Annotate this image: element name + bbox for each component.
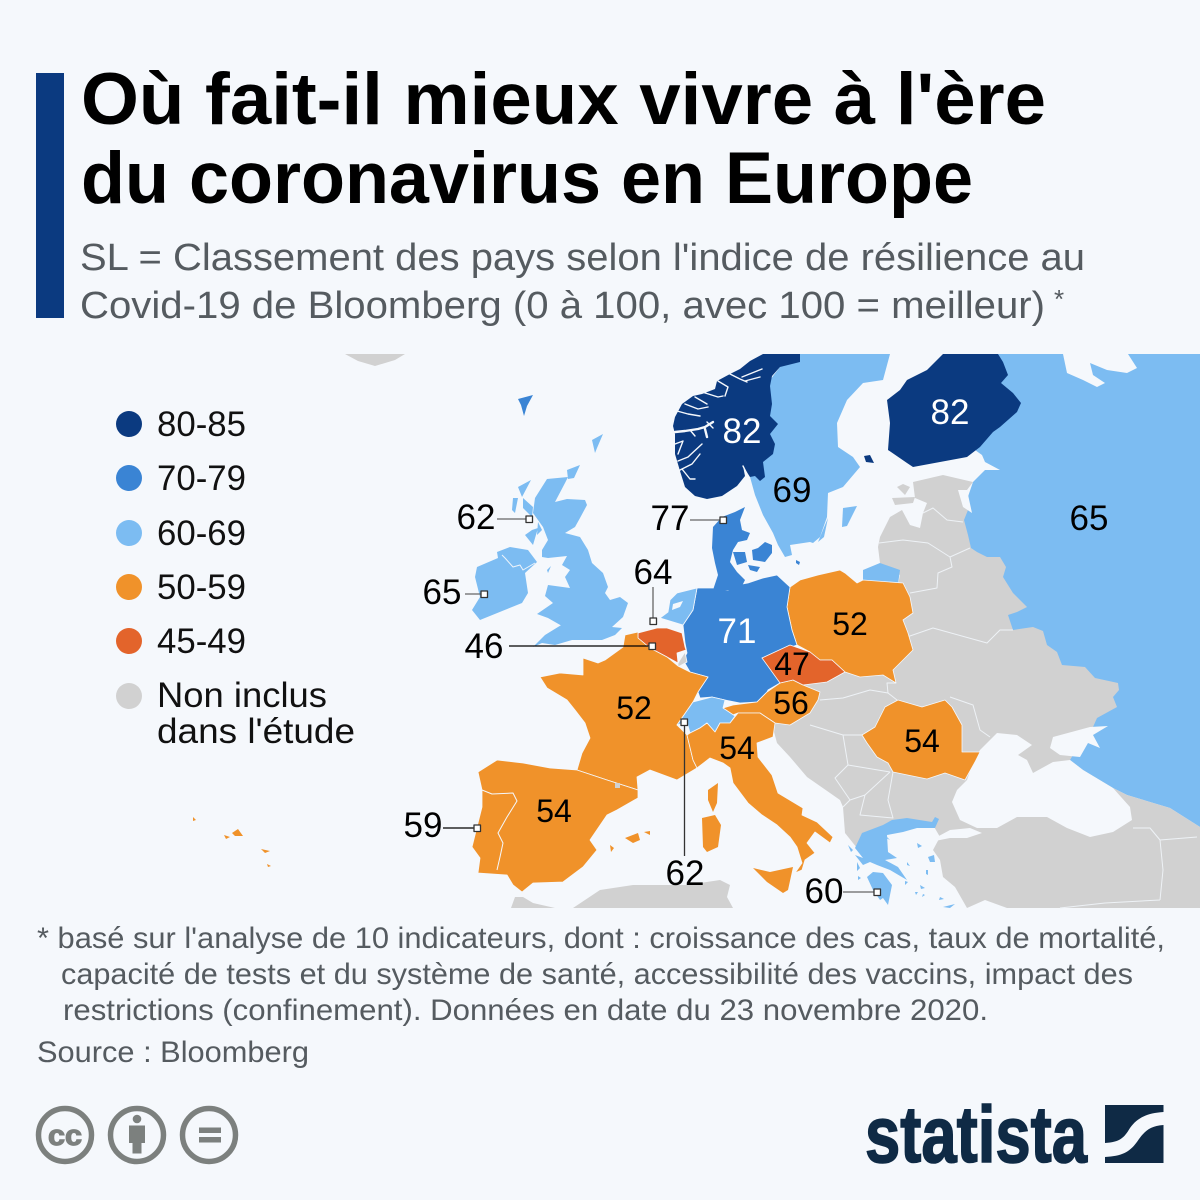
title bbox=[81, 59, 1046, 219]
map value labels: 54 bbox=[904, 723, 940, 759]
map value labels: 65 bbox=[1070, 499, 1108, 538]
Switzerland bbox=[677, 697, 735, 733]
legend item 70-79: 70-79 bbox=[157, 459, 246, 498]
United Kingdom bbox=[533, 477, 628, 647]
Zuiderzee inlet bbox=[672, 601, 683, 610]
Denmark Zealand, Funen, Lolland, Bornholm bbox=[733, 542, 800, 572]
title accent bar bbox=[36, 73, 64, 318]
Statista logo wordmark: statista bbox=[865, 1090, 1087, 1179]
Norway bbox=[673, 354, 800, 499]
Greek islands bbox=[848, 835, 955, 908]
Netherlands bbox=[660, 588, 697, 625]
subtitle bbox=[80, 237, 1085, 327]
legend item 50-59: 50-59 bbox=[157, 568, 246, 607]
Germany bbox=[683, 575, 797, 703]
map value labels: 77 bbox=[651, 499, 689, 538]
map value labels: 60 bbox=[805, 872, 843, 911]
legend item not included bbox=[116, 676, 355, 751]
footnote: restrictions (confinement). Données en date du 23 novembre 2020. bbox=[63, 994, 988, 1027]
title: du coronavirus en Europe bbox=[81, 138, 973, 219]
legend item 80-85: 80-85 bbox=[157, 405, 246, 444]
map value labels: 52 bbox=[616, 690, 652, 726]
Northern Ireland border bbox=[502, 555, 535, 570]
grey countries: Eastern Europe, Balkans, Turkey bbox=[773, 475, 1200, 908]
leader lines bbox=[443, 519, 877, 892]
map value labels: 82 bbox=[723, 412, 761, 451]
Czech Republic bbox=[762, 645, 845, 685]
Sea of Azov bbox=[1050, 726, 1108, 757]
Ireland bbox=[472, 547, 537, 620]
Statista logo icon bbox=[1105, 1105, 1164, 1163]
source: Source : Bloomberg bbox=[37, 1036, 309, 1069]
Peloponnese bbox=[867, 872, 892, 905]
footnote: * basé sur l'analyse de 10 indicateurs, dont : croissance des cas, taux de mortalité, bbox=[37, 922, 1165, 955]
map value labels: 59 bbox=[404, 806, 442, 845]
Sweden bbox=[750, 354, 890, 557]
marker squares bbox=[474, 516, 880, 896]
map value labels: 82 bbox=[931, 393, 969, 432]
Aland islands bbox=[864, 455, 874, 463]
legend bbox=[116, 405, 355, 751]
legend item 70-79 bbox=[116, 459, 246, 498]
subtitle: Covid-19 de Bloomberg (0 à 100, avec 100 = meilleur) bbox=[80, 285, 1045, 327]
Sea of Marmara bbox=[930, 828, 982, 842]
France bbox=[540, 632, 708, 790]
legend item 60-69: 60-69 bbox=[157, 514, 246, 553]
Russia bbox=[960, 354, 1200, 827]
Sicily bbox=[753, 867, 793, 893]
map value labels: 52 bbox=[832, 606, 868, 642]
North Africa bbox=[511, 880, 733, 908]
Greece bbox=[855, 817, 939, 880]
footnote bbox=[37, 922, 1165, 1027]
Balearic Islands bbox=[610, 831, 650, 852]
legend item 45-49: 45-49 bbox=[157, 622, 246, 661]
legend item not included: dans l'étude bbox=[157, 712, 355, 751]
map value labels: 62 bbox=[666, 854, 704, 893]
subtitle: SL = Classement des pays selon l'indice de résilience au bbox=[80, 237, 1085, 279]
Corsica and Sardinia bbox=[702, 783, 721, 852]
Kaliningrad bbox=[863, 563, 900, 584]
Scottish islands bbox=[512, 480, 542, 545]
legend item 50-59 bbox=[116, 568, 246, 607]
Gotland bbox=[842, 506, 857, 527]
Estonian islands bbox=[892, 484, 915, 505]
Romania bbox=[862, 700, 980, 780]
map value labels bbox=[404, 393, 1108, 911]
Black Sea bbox=[952, 733, 1132, 837]
map value labels: 69 bbox=[773, 471, 811, 510]
legend item 80-85 bbox=[116, 405, 246, 444]
map value labels: 46 bbox=[465, 627, 503, 666]
White Sea bbox=[1063, 354, 1137, 387]
Orkney bbox=[567, 465, 580, 479]
grey-country borders bbox=[810, 508, 1197, 908]
map value labels: 71 bbox=[718, 612, 756, 651]
map value labels: 47 bbox=[774, 646, 810, 682]
Shetland bbox=[592, 434, 603, 453]
title: Où fait-il mieux vivre à l'ère bbox=[81, 59, 1046, 140]
legend item 45-49 bbox=[116, 622, 246, 661]
map value labels: 56 bbox=[773, 685, 809, 721]
Öland bbox=[818, 518, 828, 542]
Norwegian fjords bbox=[675, 369, 762, 479]
legend item not included: Non inclus bbox=[157, 676, 327, 715]
map value labels: 62 bbox=[457, 498, 495, 537]
Denmark Jutland bbox=[712, 507, 750, 590]
Lake Peipus bbox=[958, 490, 972, 513]
Italy bbox=[687, 713, 833, 873]
Faroe Islands bbox=[518, 395, 533, 416]
icon: attribution person bbox=[110, 1108, 164, 1162]
Finland bbox=[887, 354, 1021, 467]
Poland bbox=[787, 570, 913, 683]
map of Europe bbox=[193, 354, 1200, 911]
footnote: capacité de tests et du système de santé, accessibilité des vaccins, impact des bbox=[61, 958, 1133, 991]
icon: no derivatives bbox=[182, 1108, 236, 1162]
map value labels: 64 bbox=[634, 553, 672, 592]
Isle of Man bbox=[547, 566, 551, 573]
Austria bbox=[723, 680, 820, 725]
icon: creative commons bbox=[38, 1108, 92, 1162]
map value labels: 54 bbox=[719, 730, 755, 766]
Spain and Portugal bbox=[472, 760, 638, 892]
map value labels: 65 bbox=[423, 573, 461, 612]
map value labels: 54 bbox=[536, 793, 572, 829]
Canary and Madeira islands bbox=[193, 817, 271, 867]
legend item 60-69 bbox=[116, 514, 246, 553]
subtitle: * bbox=[1054, 284, 1064, 314]
Belgium bbox=[638, 628, 686, 663]
icon: creative commons: cc bbox=[48, 1120, 82, 1152]
Luxembourg bbox=[678, 652, 687, 667]
Portugal border bbox=[482, 790, 517, 870]
Greenland fragment bbox=[345, 354, 405, 366]
Andorra bbox=[615, 783, 620, 788]
